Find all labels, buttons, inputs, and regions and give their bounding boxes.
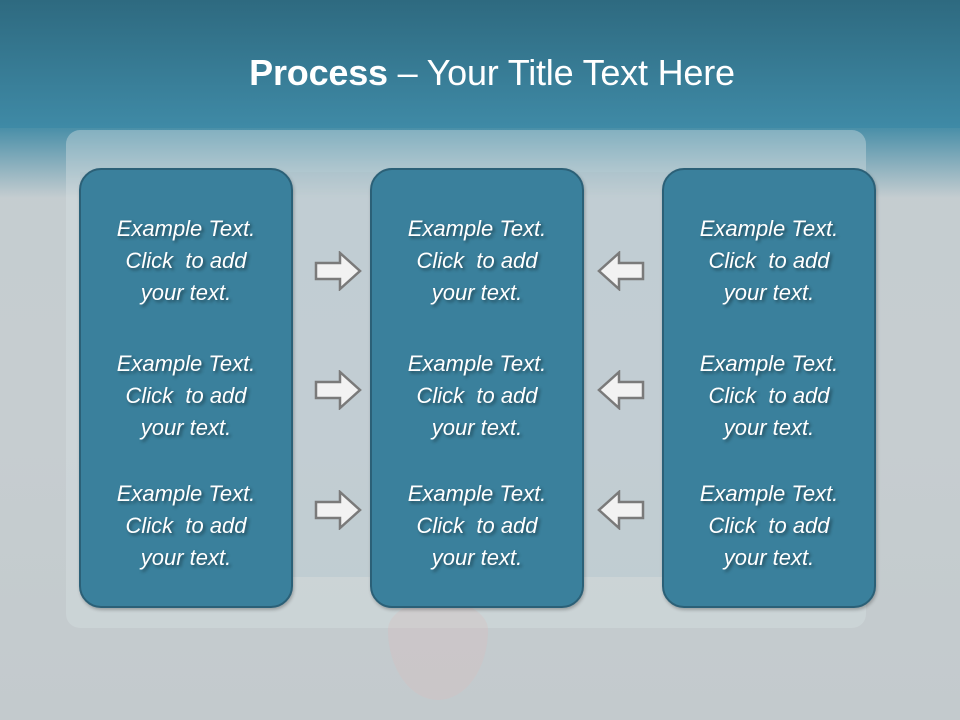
text block 3: Example Text.	[408, 481, 546, 506]
panel: right	[662, 168, 876, 608]
text block 2: your text.	[724, 415, 814, 440]
text block 3: your text.	[141, 545, 231, 570]
text block 3	[700, 481, 838, 573]
text block 2: Example Text.	[700, 351, 838, 376]
text block 2: your text.	[432, 415, 522, 440]
text block 3: Click to add	[708, 513, 830, 538]
arrow: left 3	[597, 490, 644, 530]
text block 1: Example Text.	[117, 216, 255, 241]
title: Process – Your Title Text Here	[249, 52, 735, 93]
arrow: right 1	[314, 251, 362, 291]
text block 2: Click to add	[125, 383, 247, 408]
text block 1: Click to add	[125, 248, 247, 273]
panel: left	[79, 168, 293, 608]
arrow: right 3	[314, 490, 362, 530]
text block 2: Example Text.	[408, 351, 546, 376]
text block 2	[700, 351, 838, 443]
arrow: left 1	[597, 251, 644, 291]
header band	[0, 0, 960, 128]
text block 2	[408, 351, 546, 443]
text block 3: your text.	[724, 545, 814, 570]
text block 2	[117, 351, 256, 443]
arrow: left 2	[597, 370, 644, 410]
text block 1: your text.	[141, 280, 231, 305]
text block 2: Click to add	[416, 383, 538, 408]
text block 1	[117, 216, 256, 308]
text block 3: Example Text.	[117, 481, 255, 506]
text block 1: Click to add	[708, 248, 830, 273]
background tablet	[66, 130, 866, 628]
text block 1: your text.	[432, 280, 522, 305]
text block 3	[117, 481, 256, 573]
text block 3: Click to add	[416, 513, 538, 538]
text block 1: your text.	[724, 280, 814, 305]
text block 3: Example Text.	[700, 481, 838, 506]
text block 2: Example Text.	[117, 351, 255, 376]
text block 1: Example Text.	[700, 216, 838, 241]
text block 2: Click to add	[708, 383, 830, 408]
text block 3: Click to add	[125, 513, 247, 538]
panel: middle	[370, 168, 584, 608]
text block 1	[408, 216, 546, 308]
text block 3	[408, 481, 546, 573]
text block 1: Click to add	[416, 248, 538, 273]
text block 1: Example Text.	[408, 216, 546, 241]
arrow: right 2	[314, 370, 362, 410]
text block 3: your text.	[432, 545, 522, 570]
text block 2: your text.	[141, 415, 231, 440]
text block 1	[700, 216, 838, 308]
